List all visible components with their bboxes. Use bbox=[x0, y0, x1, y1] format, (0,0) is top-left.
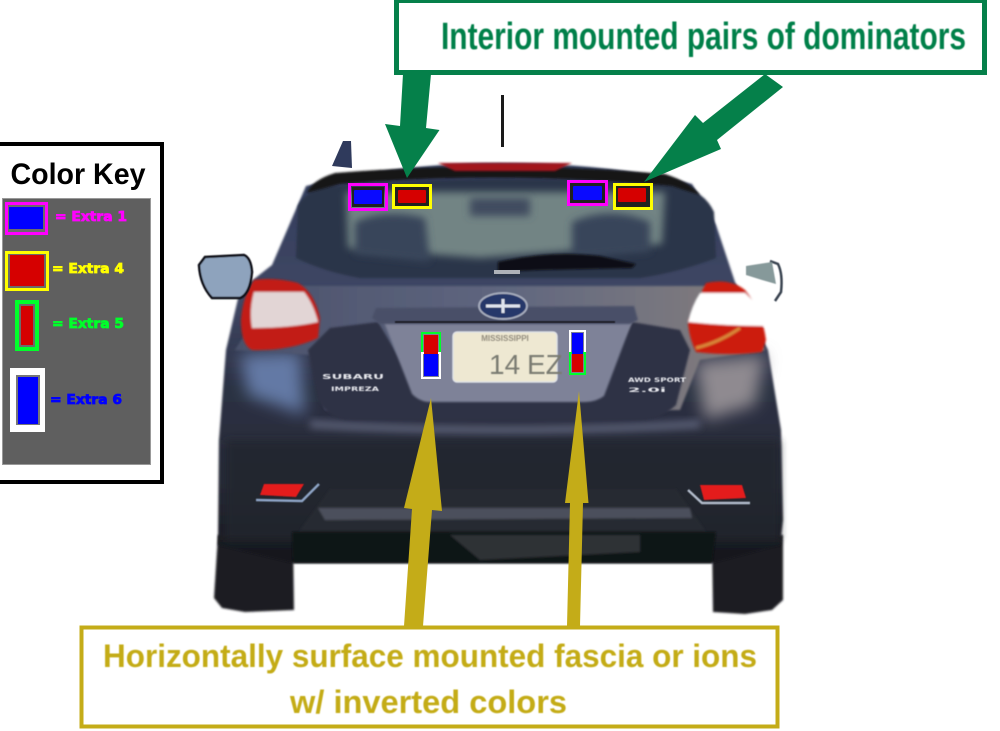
right tail light bbox=[688, 282, 766, 354]
license plate bbox=[453, 332, 563, 382]
roof fin bbox=[332, 141, 352, 168]
rear seats bbox=[355, 198, 650, 262]
license plate: EZ bbox=[527, 349, 563, 380]
left tail light bbox=[241, 279, 320, 350]
arrow: left gold bbox=[404, 398, 442, 626]
interior dominator: left pair bbox=[350, 184, 430, 210]
license plate: 14 bbox=[489, 349, 520, 380]
arrow: right gold bbox=[565, 391, 588, 626]
right badge bbox=[628, 377, 687, 394]
callout: horizontally mounted: w/ inverted colors bbox=[289, 684, 567, 720]
rear window bbox=[296, 179, 716, 278]
key item: extra 1 bbox=[6, 204, 127, 234]
left badge: SUBARU bbox=[322, 373, 385, 381]
key item: extra 4: = Extra 4 bbox=[52, 261, 124, 277]
dark lower gate bbox=[308, 322, 690, 420]
handle badge bbox=[494, 270, 520, 274]
heading: color key: Color Key bbox=[10, 158, 146, 191]
key background bbox=[2, 198, 150, 464]
car body bbox=[218, 163, 783, 563]
arrow: right green bbox=[644, 74, 783, 182]
bumper crease bbox=[310, 420, 700, 434]
left badge: IMPREZA bbox=[331, 386, 380, 393]
tailgate bar bbox=[372, 306, 638, 324]
lower shadow bbox=[225, 440, 780, 540]
antenna bbox=[501, 95, 504, 147]
left reflector bbox=[256, 484, 319, 501]
spoiler bbox=[307, 167, 700, 195]
panel: color key bbox=[0, 144, 162, 482]
key item: extra 5: = Extra 5 bbox=[52, 316, 124, 332]
plate recess bbox=[384, 322, 632, 402]
key item: extra 5 bbox=[17, 302, 124, 349]
callout: horizontally mounted: Horizontally surface mounted fascia or ions bbox=[103, 638, 757, 674]
callout: horizontally mounted bbox=[82, 628, 778, 726]
wheels bbox=[214, 535, 783, 614]
right badge: AWD SPORT bbox=[628, 377, 687, 384]
wiper bbox=[498, 254, 636, 272]
car photo: rear view bbox=[199, 95, 783, 614]
window glass reflection bbox=[346, 192, 665, 258]
key item: extra 6 bbox=[10, 368, 122, 432]
high mount brake light bbox=[438, 163, 572, 171]
license plate: MISSISSIPPI bbox=[481, 334, 529, 343]
lower bumper trim bbox=[292, 489, 716, 563]
tailgate bbox=[235, 286, 765, 410]
interior dominator: right pair bbox=[568, 182, 652, 208]
right mirror bbox=[746, 261, 782, 301]
right reflector bbox=[688, 485, 750, 503]
fascia light: left bbox=[422, 333, 440, 378]
left mirror bbox=[199, 255, 252, 298]
left badge bbox=[322, 373, 385, 393]
callout: interior mounted bbox=[396, 0, 984, 72]
key item: extra 1: = Extra 1 bbox=[55, 209, 127, 225]
side highlights bbox=[240, 352, 765, 420]
arrow: left green bbox=[385, 74, 440, 178]
fascia light: right bbox=[570, 331, 585, 374]
key item: extra 6: = Extra 6 bbox=[50, 392, 122, 408]
right badge: 2.0i bbox=[628, 387, 666, 394]
subaru logo bbox=[479, 293, 527, 319]
key item: extra 4 bbox=[6, 252, 124, 290]
